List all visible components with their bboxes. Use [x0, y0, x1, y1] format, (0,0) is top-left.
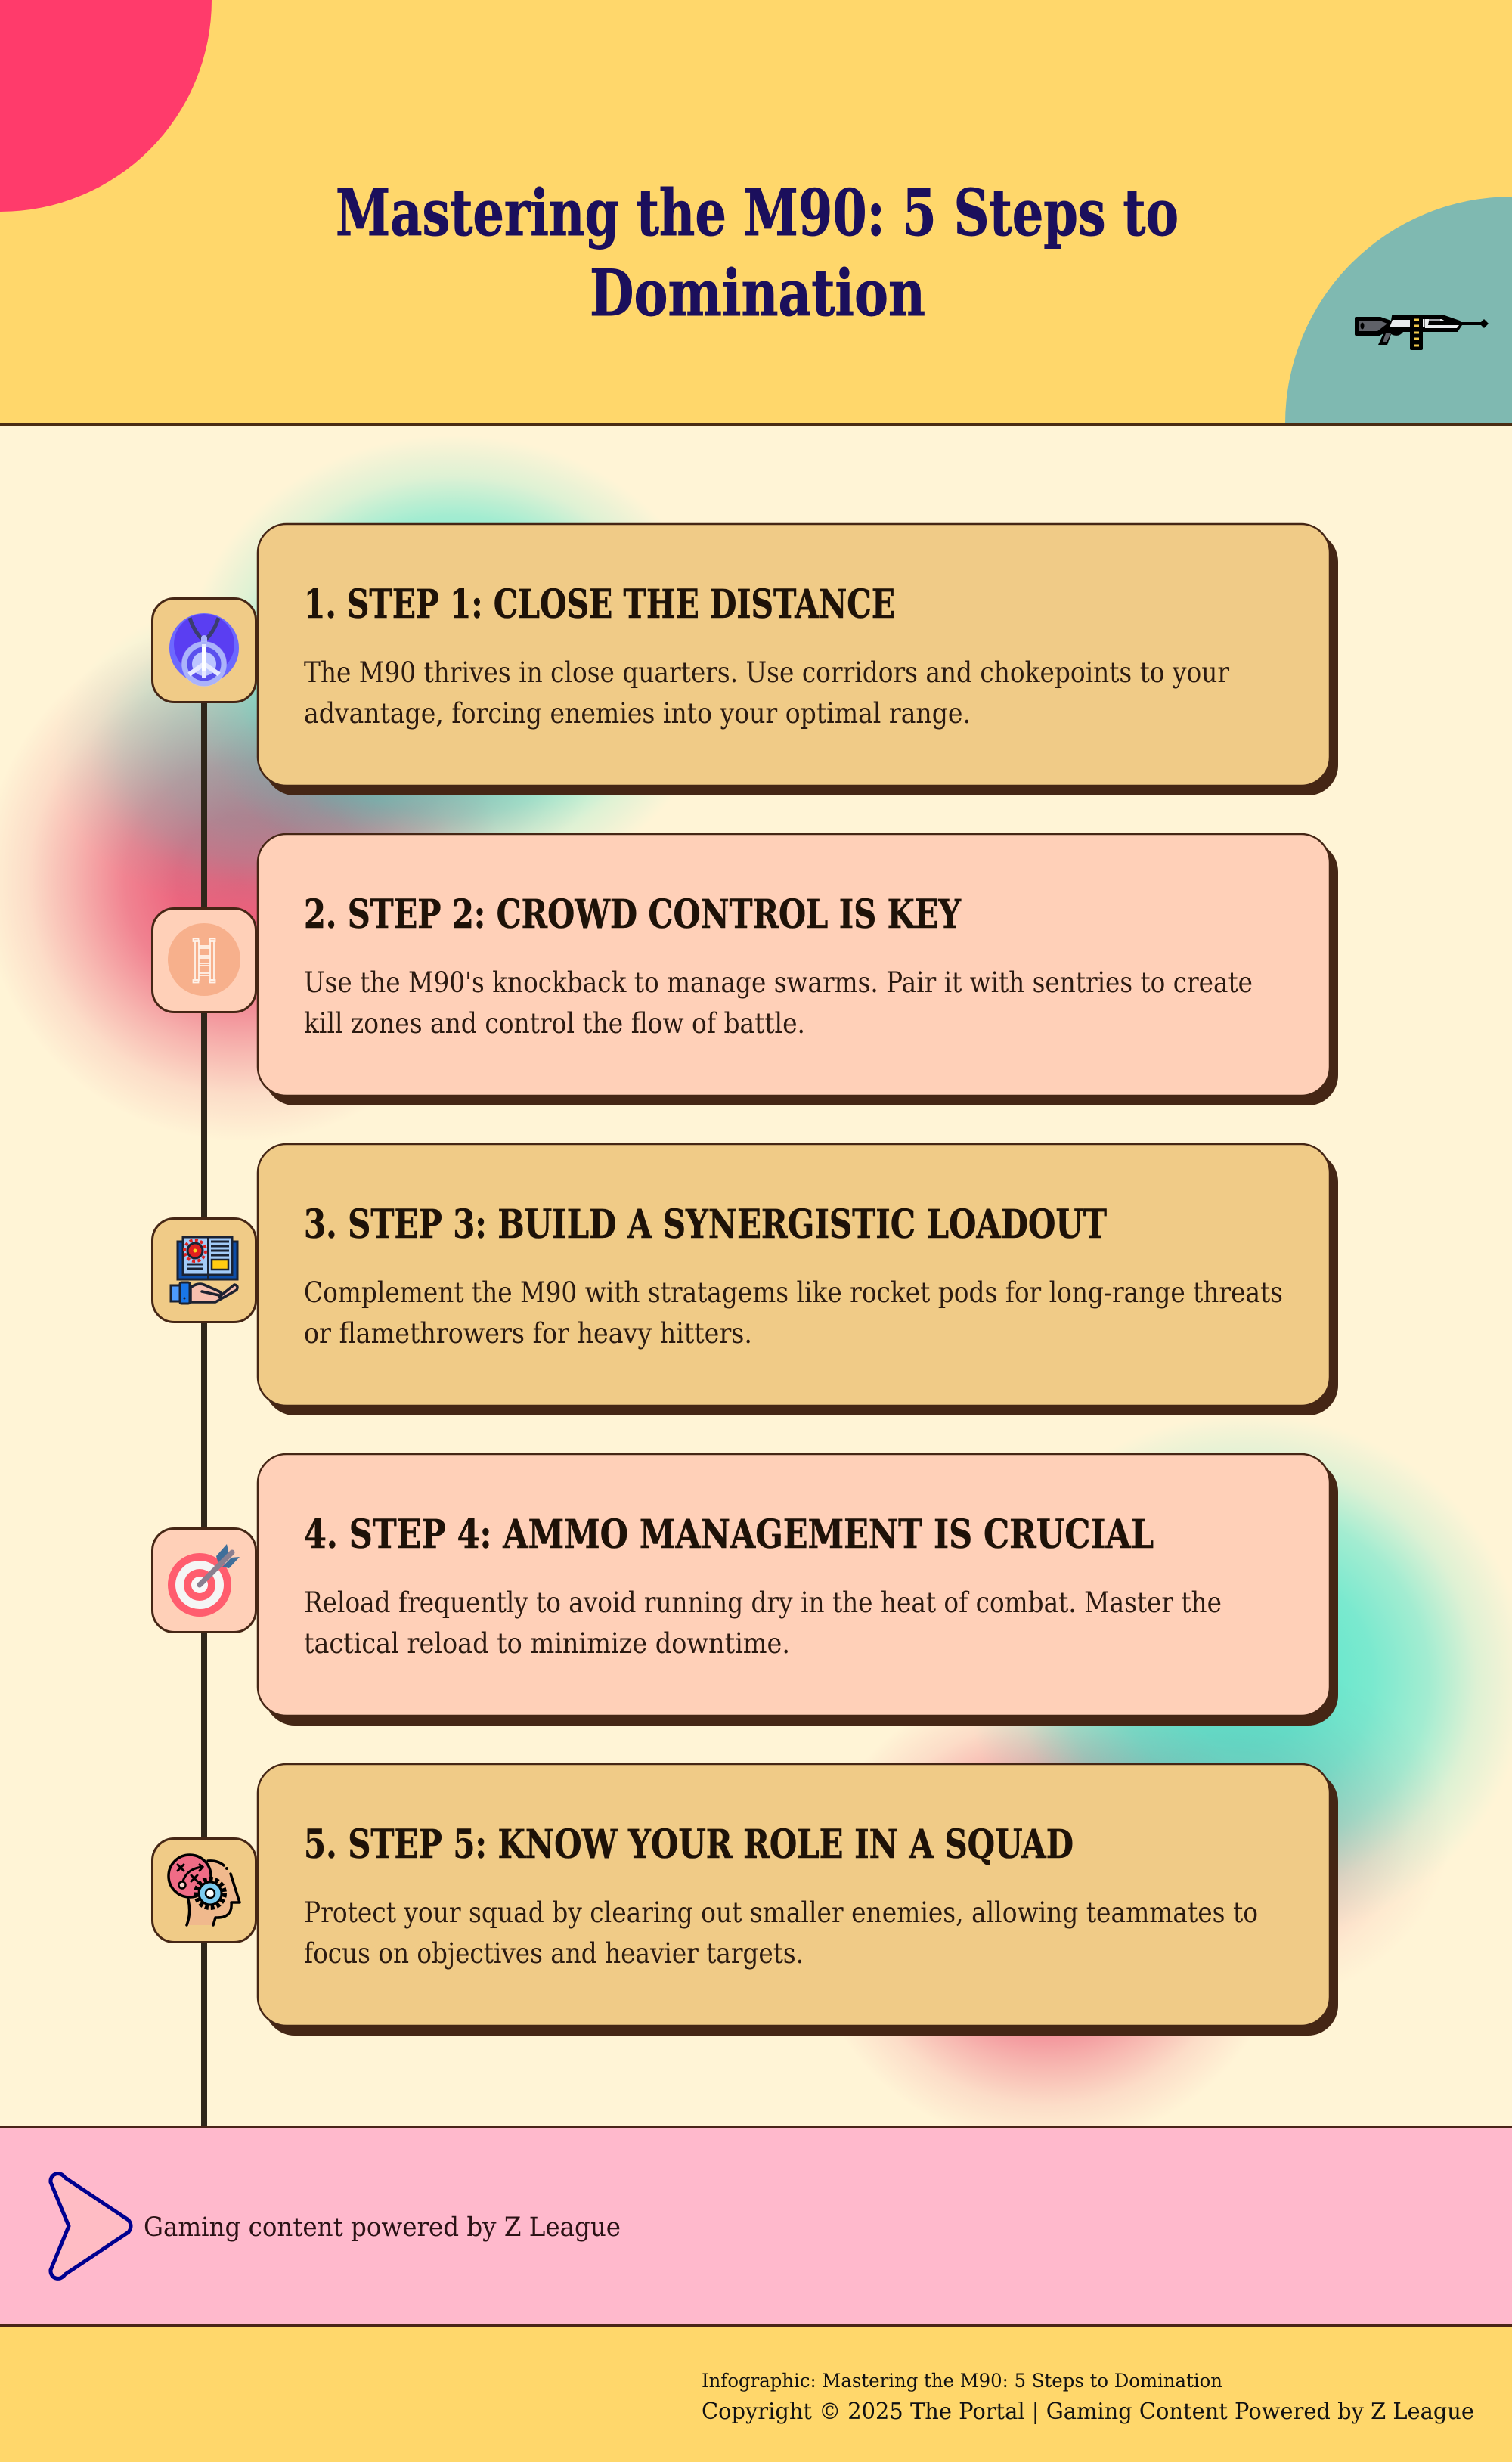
header divider	[0, 423, 1512, 426]
step description	[304, 1896, 1258, 1970]
panel: step 5	[258, 1764, 1338, 2036]
icon: arrow	[51, 2174, 131, 2278]
step heading: 5. STEP 5: KNOW YOUR ROLE IN A SQUAD	[304, 1822, 1074, 1868]
step description: tactical reload to minimize downtime.	[304, 1627, 790, 1660]
panel: sponsor band	[0, 2126, 1512, 2327]
card shadow	[265, 1462, 1338, 1726]
step description	[304, 656, 1229, 730]
blob: lower teal	[986, 1426, 1512, 1916]
title: Domination	[590, 256, 925, 330]
card shadow	[265, 532, 1338, 795]
title: Mastering the M90: 5 Steps to	[336, 175, 1179, 250]
panel: header	[0, 0, 1512, 423]
step description	[304, 1586, 1222, 1660]
step description: Complement the M90 with stratagems like rocket pods for long-range threats	[304, 1276, 1283, 1309]
timeline line	[201, 699, 207, 2126]
sponsor text: Gaming content powered by Z League	[144, 2212, 621, 2243]
panel: step 1	[258, 524, 1338, 795]
icon box: step 4 target	[153, 1529, 256, 1632]
decorative teal circle	[1285, 197, 1512, 423]
blob: upper teal	[207, 445, 659, 833]
card shadow	[265, 1152, 1338, 1415]
step heading: 2. STEP 2: CROWD CONTROL IS KEY	[304, 891, 962, 938]
blob: lower red	[860, 1726, 1235, 2126]
decorative red circle	[0, 0, 212, 212]
step description: Protect your squad by clearing out smaller enemies, allowing teammates to	[304, 1896, 1258, 1929]
icon box: step 1 medal	[153, 599, 256, 702]
card body	[258, 1764, 1330, 2026]
panel: step 3	[258, 1144, 1338, 1415]
icon box: step 2 ladder	[153, 909, 256, 1012]
step heading: 1. STEP 1: CLOSE THE DISTANCE	[304, 581, 895, 628]
blob: upper teal extension	[72, 638, 419, 899]
step description: advantage, forcing enemies into your optimal range.	[304, 697, 971, 730]
icon: machine gun	[1355, 315, 1489, 350]
card body	[258, 834, 1330, 1096]
panel: main background	[0, 426, 1512, 2126]
step description	[304, 966, 1253, 1040]
card body	[258, 1144, 1330, 1406]
step description: focus on objectives and heavier targets.	[304, 1937, 804, 1970]
background blobs	[0, 435, 1512, 2147]
step description: kill zones and control the flow of battle.	[304, 1007, 805, 1040]
blob: upper red	[0, 655, 472, 1125]
panel: step 4	[258, 1454, 1338, 1726]
panel: step 2	[258, 834, 1338, 1105]
step description	[304, 1276, 1283, 1350]
icon box: step 5 strategy head	[153, 1839, 256, 1942]
icon box: step 3 book and hand	[153, 1219, 256, 1322]
card body	[258, 524, 1330, 786]
footer caption: Infographic: Mastering the M90: 5 Steps to Domination	[702, 2370, 1222, 2392]
blob: upper red extension	[268, 780, 553, 833]
step description: The M90 thrives in close quarters. Use corridors and chokepoints to your	[304, 656, 1229, 689]
title	[337, 186, 1177, 316]
step heading: 4. STEP 4: AMMO MANAGEMENT IS CRUCIAL	[304, 1512, 1154, 1558]
step heading: 3. STEP 3: BUILD A SYNERGISTIC LOADOUT	[304, 1202, 1107, 1248]
card shadow	[265, 842, 1338, 1105]
panel: footer	[0, 2327, 1512, 2462]
card shadow	[265, 1772, 1338, 2036]
step description: or flamethrowers for heavy hitters.	[304, 1317, 752, 1350]
step description: Reload frequently to avoid running dry in the heat of combat. Master the	[304, 1586, 1222, 1619]
card body	[258, 1454, 1330, 1716]
blob: lower red extension	[1074, 1721, 1420, 1957]
step description: Use the M90's knockback to manage swarms. Pair it with sentries to create	[304, 966, 1253, 999]
footer copyright: Copyright © 2025 The Portal | Gaming Content Powered by Z League	[702, 2398, 1474, 2425]
